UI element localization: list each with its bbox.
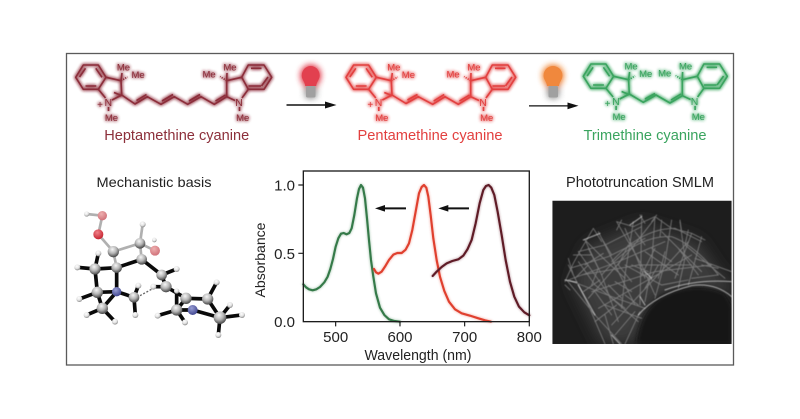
molecule: heptamethine cyanine: + xyxy=(97,100,103,111)
x axis tick labels: 700 xyxy=(452,329,477,346)
y axis tick labels: 1.0 xyxy=(274,178,295,194)
molecule: trimethine cyanine: + xyxy=(605,99,611,110)
molecule: heptamethine cyanine: Me xyxy=(202,70,216,80)
molecule: heptamethine cyanine: N xyxy=(235,97,243,109)
absorbance chart xyxy=(252,171,542,364)
molecule: heptamethine cyanine: Me xyxy=(117,62,130,74)
y axis tick labels xyxy=(274,178,295,331)
molecule: trimethine cyanine: Me xyxy=(692,112,705,123)
molecule: heptamethine cyanine: N xyxy=(105,97,112,109)
molecule: heptamethine cyanine xyxy=(76,62,272,124)
arrow: first reaction xyxy=(286,102,336,108)
molecule: pentamethine cyanine: Me xyxy=(387,62,400,74)
molecule: pentamethine cyanine: Me xyxy=(402,70,415,81)
molecule: pentamethine cyanine: + xyxy=(367,100,373,111)
x axis tick labels xyxy=(323,329,542,346)
y axis tick labels: 0.5 xyxy=(274,246,295,263)
heading: Phototruncation SMLM: Phototruncation SMLM xyxy=(566,175,714,191)
label: Heptamethine cyanine: Heptamethine cyanine xyxy=(104,127,249,144)
x axis tick labels: 800 xyxy=(517,329,542,346)
arrow: second reaction xyxy=(529,102,578,109)
microscopy image: SMLM filaments xyxy=(552,201,732,344)
molecule: pentamethine cyanine: Me xyxy=(446,70,460,80)
arrow: red to green shift xyxy=(375,205,406,212)
x axis tick labels: 500 xyxy=(323,329,348,346)
molecule: pentamethine cyanine: Me xyxy=(375,113,388,124)
icon: orange light bulb xyxy=(544,66,562,98)
molecule: heptamethine cyanine: Me xyxy=(236,113,249,124)
axes box xyxy=(303,171,529,322)
molecule: trimethine cyanine: Me xyxy=(679,62,692,72)
curve: pentamethine absorbance (red) xyxy=(374,185,491,322)
molecule: trimethine cyanine: Me xyxy=(658,68,671,80)
molecule: pentamethine cyanine: N xyxy=(375,97,382,109)
molecule: trimethine cyanine: N xyxy=(691,96,698,108)
x axis title: Wavelength (nm) xyxy=(364,347,472,364)
icon: red light bulb xyxy=(302,66,320,98)
panel: outer frame xyxy=(66,54,734,365)
molecule: heptamethine cyanine: Me xyxy=(223,62,237,74)
molecule: trimethine cyanine: N xyxy=(612,96,620,108)
molecule: trimethine cyanine: Me xyxy=(624,62,638,72)
3D molecular model xyxy=(74,211,245,338)
molecule: trimethine cyanine: Me xyxy=(612,112,626,123)
curve: trimethine absorbance (green) xyxy=(303,185,400,322)
molecule: heptamethine cyanine: Me xyxy=(132,70,145,81)
arrow: dark to red shift xyxy=(438,205,469,212)
y axis title: Absorbance xyxy=(252,222,268,298)
y axis tick labels: 0.0 xyxy=(274,314,295,331)
molecule: pentamethine cyanine: N xyxy=(479,97,487,109)
molecule: pentamethine cyanine: Me xyxy=(480,113,493,124)
heading: Mechanistic basis: Mechanistic basis xyxy=(96,174,212,190)
curve: heptamethine absorbance (dark red) xyxy=(433,185,529,315)
label: Trimethine cyanine: Trimethine cyanine xyxy=(584,127,706,144)
molecule: trimethine cyanine: Me xyxy=(639,69,652,80)
molecule: trimethine cyanine xyxy=(583,62,727,123)
molecule: pentamethine cyanine: Me xyxy=(467,62,481,74)
x axis tick labels: 600 xyxy=(387,329,413,346)
molecule: pentamethine cyanine xyxy=(346,62,516,124)
label: Pentamethine cyanine: Pentamethine cyanine xyxy=(358,127,502,144)
molecule: heptamethine cyanine: Me xyxy=(105,113,118,124)
